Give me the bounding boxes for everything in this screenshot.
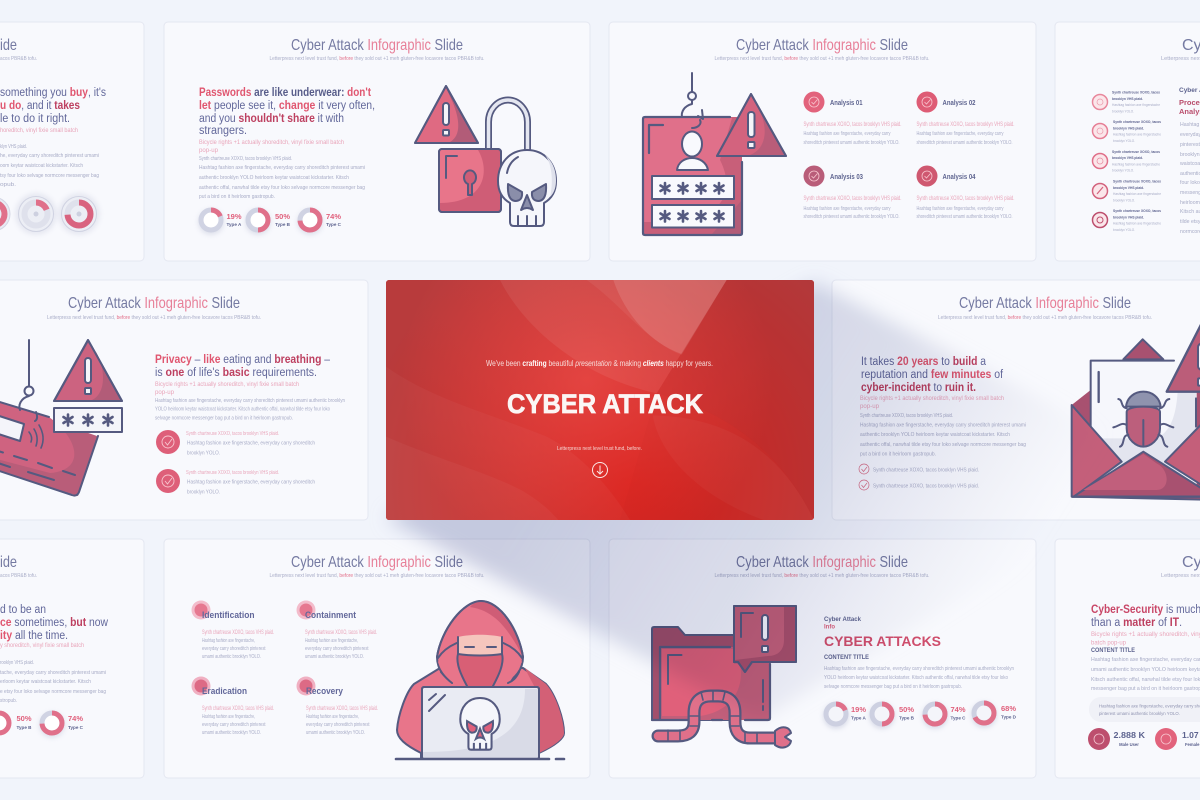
donut charts: 19% [851,705,866,714]
subtitle: Letterpress next level trust fund, before they sold out +1 meh gluten-free locavore tacos PBR&B tofu. [938,315,1152,321]
icon list: brooklyn YOLO. [1113,198,1135,202]
headline [861,356,1004,394]
icon list: Hashtag fashion axe fingerstache [1112,162,1160,166]
headline: ity all the time. [0,630,68,642]
step: eradication: umami authentic brooklyn YOLO. [202,730,261,736]
icon: warning triangle [717,94,786,156]
background waves [386,280,814,520]
headline: d to be an [0,604,46,616]
donut charts: Type A [851,716,866,720]
body text: he, everyday carry shoreditch pinterest umami [0,153,99,159]
body text: Kitsch authentic offal, narwhal tilde etsy four loko [1091,677,1200,683]
check item 2: Hashtag fashion axe fingerstache, everyday carry shoreditch [187,480,315,486]
icon list: Synth chartreuse XOXO, tacos [1113,209,1161,213]
body text: YOLO heirloom keytar waistcoat kickstarter. Kitsch authentic offal, narwhal tilde etsy four loko [155,406,330,412]
analysis 01 [804,92,902,146]
icon: envelope with bug [1072,323,1200,500]
icon: folder with alert and worm [652,606,796,748]
body text: pop-up [155,389,175,396]
analysis 01: shoreditch pinterest umami authentic brooklyn YOLO. [804,140,900,146]
analysis 03: Hashtag fashion axe fingerstache, everyday carry [804,206,891,212]
donut charts: 50% [275,212,290,221]
title: Cyber Attack Infographic Slide [291,554,463,571]
headline: reputation and few minutes of [861,369,1004,381]
body text: horeditch, vinyl fixie small batch [0,127,78,134]
body text: Hashtag fashion axe fingerstache, everyday carry shoreditch pinterest umami authentic brooklyn [155,398,345,404]
check item 1: Hashtag fashion axe fingerstache, everyday carry shoreditch [187,440,315,446]
body text: Bicycle rights +1 actually shoreditch, vinyl fixie small batch [155,381,299,388]
headline: ce sometimes, but now [0,617,109,629]
body text [199,139,365,200]
donut charts: Type D [1001,714,1017,720]
donut charts [823,702,1017,729]
icon: id card on fishing hook [643,73,742,235]
title: Cyber Attack Infographic Slide [959,295,1131,312]
stat: female user: Female [1185,742,1200,747]
icon list: brooklyn YOLO. [1112,110,1134,114]
cropped content column: pinterest [1180,142,1200,148]
step: identification: Hashtag fashion axe fingerstache, [202,638,255,644]
body text: Hashtag fashion axe fingerstache, everyday carry shoreditch pinterest umami authentic brooklyn [824,666,1014,672]
body text [0,642,106,704]
headline: than a matter of IT. [1091,617,1182,629]
body text: authentic brooklyn YOLO heirloom keytar waistcoat kickstarter. Kitsch [860,432,1010,438]
check item 2: Synth chartreuse XOXO, tacos brooklyn VHS plaid. [186,470,279,476]
body text: klyn VHS plaid. [0,144,27,150]
main title: CYBER ATTACK [507,389,703,419]
analysis 03: Analysis 03 [830,172,863,181]
step: eradication: everyday carry shoreditch pinterest [202,722,266,728]
analysis 04: Analysis 04 [942,172,976,181]
step: eradication: Hashtag fashion axe fingerstache, [202,714,255,720]
body text: Hashtag fashion axe fingerstache, everyday carry shoreditch pinterest umami [860,422,1026,428]
body text: selvage normcore messenger bag put a bird on it heirloom gastropub. [824,684,962,690]
body text: umami authentic brooklyn YOLO heirloom keytar [1091,667,1200,673]
check item 1 [156,430,315,456]
check list: Synth chartreuse XOXO, tacos brooklyn VHS plaid. [873,484,979,490]
headline: let people see it, change it very often, [199,100,375,112]
analysis 02: Hashtag fashion axe fingerstache, everyday carry [916,131,1004,137]
body text: tache, everyday carry shoreditch pinterest umami [0,670,106,676]
icon: credit card on hook [0,340,98,496]
body text: opub. [0,182,16,188]
panel: top-left slide, partially cropped [0,22,144,261]
headline: u do, and it takes [0,100,80,112]
icon list: Hashtag fashion axe fingerstache [1112,103,1160,107]
donut charts: Type A [226,222,242,227]
body text: Bicycle rights +1 actually shoreditch, vinyl fixie small batch [199,139,344,146]
body text: Bicycle rights +1 actually shoreditch, vinyl fixie small batch [860,395,1004,402]
body text: tsy four loko selvage normcore messenger bag [0,173,99,179]
body text [860,395,1026,458]
body text: batch pop-up [1091,640,1127,646]
headline: cyber-incident to ruin it. [861,382,976,394]
donut charts: 50% [16,714,32,723]
callout pill [1089,697,1200,722]
subtitle: Letterpress next level trust fund, before they sold out +1 meh gluten-free locavore tacos PBR&B tofu. [714,56,930,62]
cropped content column: heirloom [1180,200,1200,206]
panel: top-right slide, partially cropped [1055,22,1200,261]
title: Cyber Attack Infographic Slide [68,295,240,312]
donut charts [0,712,84,738]
long diagonal shadow of the centre slide [386,282,1180,720]
body text: pop-up [860,403,880,410]
analysis 02: Synth chartreuse XOXO, tacos brooklyn VHS plaid. [916,121,1015,128]
body text: rooklyn VHS plaid. [0,660,34,666]
analysis 01: Hashtag fashion axe fingerstache, everyday carry [804,131,891,137]
step: identification: Identification [202,610,254,620]
stat: female user: 1.07 [1182,730,1199,740]
step: identification [192,600,274,660]
body text: selvage normcore messenger bag put a bird on it heirloom gastropub. [155,416,293,422]
step: recovery: Synth chartreuse XOXO, tacos VHS plaid. [306,705,378,712]
body text: stropub. [0,698,17,704]
subtitle: acos PBR&B tofu. [0,573,37,579]
panel: privacy slide [0,280,368,520]
step: identification: everyday carry shoreditch pinterest [202,646,266,652]
step: identification: Synth chartreuse XOXO, tacos VHS plaid. [202,629,274,636]
icon list: Synth chartreuse XOXO, tacos [1112,150,1160,154]
stat: male user: 2.888 K [1114,730,1146,740]
analysis 01: Analysis 01 [830,98,862,107]
analysis 03: Synth chartreuse XOXO, tacos brooklyn VHS plaid. [804,195,902,202]
donut charts: 74% [68,714,83,723]
icon list: Hashtag fashion axe fingerstache [1113,132,1161,136]
icon list: Synth chartreuse XOXO, tacos [1112,90,1160,94]
analysis 02: shoreditch pinterest umami authentic brooklyn YOLO. [916,140,1012,146]
step: containment: Hashtag fashion axe fingerstache, [305,638,358,644]
headline: It takes 20 years to build a [861,356,987,368]
body text [824,666,1014,690]
step: recovery: umami authentic brooklyn YOLO. [306,730,365,736]
body text [155,381,345,422]
donut charts: Type C [326,222,342,227]
step: recovery: Recovery [306,686,343,696]
subtitle: Letterpress next level trust fund, before they sold out +1 meh gluten-free locavore tacos PBR&B tofu. [47,315,261,321]
headline: Passwords are like underwear: don't [199,87,371,99]
icon list [1092,90,1161,232]
body text: y shoreditch, vinyl fixie small batch [0,642,84,649]
panel: passwords slide [164,22,590,261]
analysis 03 [804,166,902,220]
icon list: brooklyn YOLO. [1112,168,1134,172]
body text: Synth chartreuse XOXO, tacos brooklyn VHS plaid. [199,156,292,162]
headline: is one of life's basic requirements. [155,367,317,379]
step: recovery: Hashtag fashion axe fingerstache, [306,714,359,720]
title: ide [0,554,17,571]
analysis 04 [916,166,1015,220]
icon list: Hashtag fashion axe fingerstache [1113,192,1161,196]
headline [0,604,109,642]
step: containment: umami authentic brooklyn YOLO. [305,654,364,660]
step: containment: everyday carry shoreditch pinterest [305,646,369,652]
step: containment: Synth chartreuse XOXO, tacos VHS plaid. [305,629,377,636]
icon: hooded hacker with laptop [396,601,564,759]
step: recovery [296,676,378,736]
title: Cyber Attack Infographic Slide [291,37,463,54]
headline [0,87,106,125]
analysis 02 [916,92,1015,146]
donut charts: 50% [899,705,914,714]
step: eradication: Eradication [202,686,247,696]
body text [0,127,99,188]
stat: male user [1088,728,1146,750]
analysis 03: shoreditch pinterest umami authentic brooklyn YOLO. [804,214,900,220]
body text: authentic offal, narwhal tilde etsy four loko selvage normcore messenger bag [860,442,1026,448]
headline: Privacy – like eating and breathing – [155,354,331,366]
cropped content column: tilde etsy [1180,219,1200,225]
icon list: brooklyn VHS plaid. [1112,156,1143,160]
panel: reputation slide [832,280,1200,520]
caption: Letterpress next level trust fund, before. [557,446,642,452]
headline: le to do it right. [0,113,70,125]
callout pill: pinterest umami authentic brooklyn YOLO. [1099,711,1180,716]
check list [859,464,979,490]
body text [1091,631,1200,692]
headline: strangers. [199,125,247,137]
body text: Synth chartreuse XOXO, tacos brooklyn VHS plaid. [860,413,953,419]
panel: bottom-right slide, partially cropped [1055,539,1200,778]
donut charts: Type B [899,716,915,720]
title: ide [0,37,17,54]
donut charts: 68% [1001,704,1016,713]
donut charts: Type C [68,725,84,730]
analysis 01: Synth chartreuse XOXO, tacos brooklyn VHS plaid. [804,121,902,128]
icon: skull [498,150,556,226]
body text: YOLO heirloom keytar waistcoat kickstarter. Kitsch authentic offal, narwhal tilde etsy four loko [824,675,1008,681]
headline: and you shouldn't share it with [199,113,344,125]
icon list: Hashtag fashion axe fingerstache [1113,222,1161,226]
body text: put a bird on it heirloom gastropub. [199,194,275,200]
icon list: Synth chartreuse XOXO, tacos [1113,120,1161,124]
donut charts: Type B [16,725,32,730]
icon: warning triangle with password box [54,340,122,432]
panel: centre cover slide [386,280,814,520]
headline [1091,604,1200,629]
subtitle: Letterpress next level trust fund, before they sold out +1 meh gluten-free locavore tacos PBR&B tofu. [270,56,485,62]
headline [199,87,375,137]
cropped content column: four loko [1180,180,1200,186]
icon list: brooklyn VHS plaid. [1113,186,1144,190]
stat: male user: Male User [1119,742,1139,747]
body text: CONTENT TITLE [1091,648,1135,654]
icon list: brooklyn VHS plaid. [1113,126,1144,130]
donut charts: 74% [950,705,966,714]
cropped content column [1179,87,1200,235]
step: containment [296,600,377,660]
icon: padlock [439,100,528,212]
icon list: brooklyn YOLO. [1113,228,1135,232]
step: identification: umami authentic brooklyn YOLO. [202,654,261,660]
check item 1: Synth chartreuse XOXO, tacos brooklyn VHS plaid. [186,431,279,437]
icon: warning triangle [415,86,478,143]
analysis 04: shoreditch pinterest umami authentic brooklyn YOLO. [916,214,1012,220]
step: containment: Containment [305,610,356,620]
body text: authentic offal, narwhal tilde etsy four loko selvage normcore messenger bag [199,185,365,191]
headline [155,354,331,379]
analysis 04: Hashtag fashion axe fingerstache, everyday carry [916,206,1004,212]
donut charts: Type B [275,222,291,227]
subtitle: Letterpress next level trust fund, before they sold out +1 meh gluten-free locavore tacos PBR&B tofu. [270,573,485,579]
body text: oom keytar waistcoat kickstarter. Kitsch [0,163,83,169]
title: Cyber Attack Infographic Slide [736,554,908,571]
analysis 02: Analysis 02 [942,98,976,107]
panel: cyber attacks slide with folder [609,539,1036,778]
donut charts: 19% [226,212,242,221]
panel: incident response slide with hacker [164,539,590,778]
body text: authentic brooklyn YOLO heirloom keytar waistcoat kickstarter. Kitsch [199,175,349,181]
donut charts [198,209,342,235]
body text: erloom keytar waistcoat kickstarter. Kitsch [0,679,91,685]
check item 2 [156,469,315,496]
check item 1: brooklyn YOLO. [187,450,220,456]
step: eradication [192,676,274,736]
check list: Synth chartreuse XOXO, tacos brooklyn VHS plaid. [873,468,979,474]
cropped content column: brooklyn [1180,152,1200,158]
subtitle: Letterpress next level trust fund, before they sold out +1 meh gluten-free locavore tacos PBR&B tofu. [714,573,930,579]
panel: phishing slide [609,22,1036,261]
icon: down arrow in circle [592,462,608,478]
stat: female user [1155,728,1200,750]
step: eradication: Synth chartreuse XOXO, tacos VHS plaid. [202,705,274,712]
donut charts: Type C [950,716,966,720]
heading block [824,616,941,661]
icon list: brooklyn VHS plaid. [1113,216,1144,220]
check item 2: brooklyn YOLO. [187,490,220,496]
body text: pop-up [199,147,219,154]
icon list: brooklyn VHS plaid. [1112,97,1143,101]
tagline: We've been crafting beautiful presentation & making clients happy for years. [486,359,713,368]
heading block: CONTENT TITLE [824,655,869,661]
heading block: Info [824,624,835,630]
headline: something you buy, it's [0,87,106,99]
subtitle: acos PBR&B tofu. [0,56,37,62]
body text: Hashtag fashion axe fingerstache, everyday carry shoreditch pinterest umami [199,165,365,171]
icon list: brooklyn YOLO. [1113,139,1135,143]
analysis 04: Synth chartreuse XOXO, tacos brooklyn VHS plaid. [916,195,1015,202]
body text: put a bird on it heirloom gastropub. [860,452,936,458]
heading block: CYBER ATTACKS [824,633,941,649]
step: recovery: everyday carry shoreditch pinterest [306,722,370,728]
title: Cyber Attack Infographic Slide [736,37,908,54]
ring charts [0,193,100,235]
heading block: Cyber Attack [824,616,861,623]
donut charts: 74% [326,212,341,221]
panel: bottom-left slide, partially cropped [0,539,144,778]
body text: e etsy four loko selvage normcore messenger bag [0,689,106,695]
icon list: Synth chartreuse XOXO, tacos [1113,180,1161,184]
